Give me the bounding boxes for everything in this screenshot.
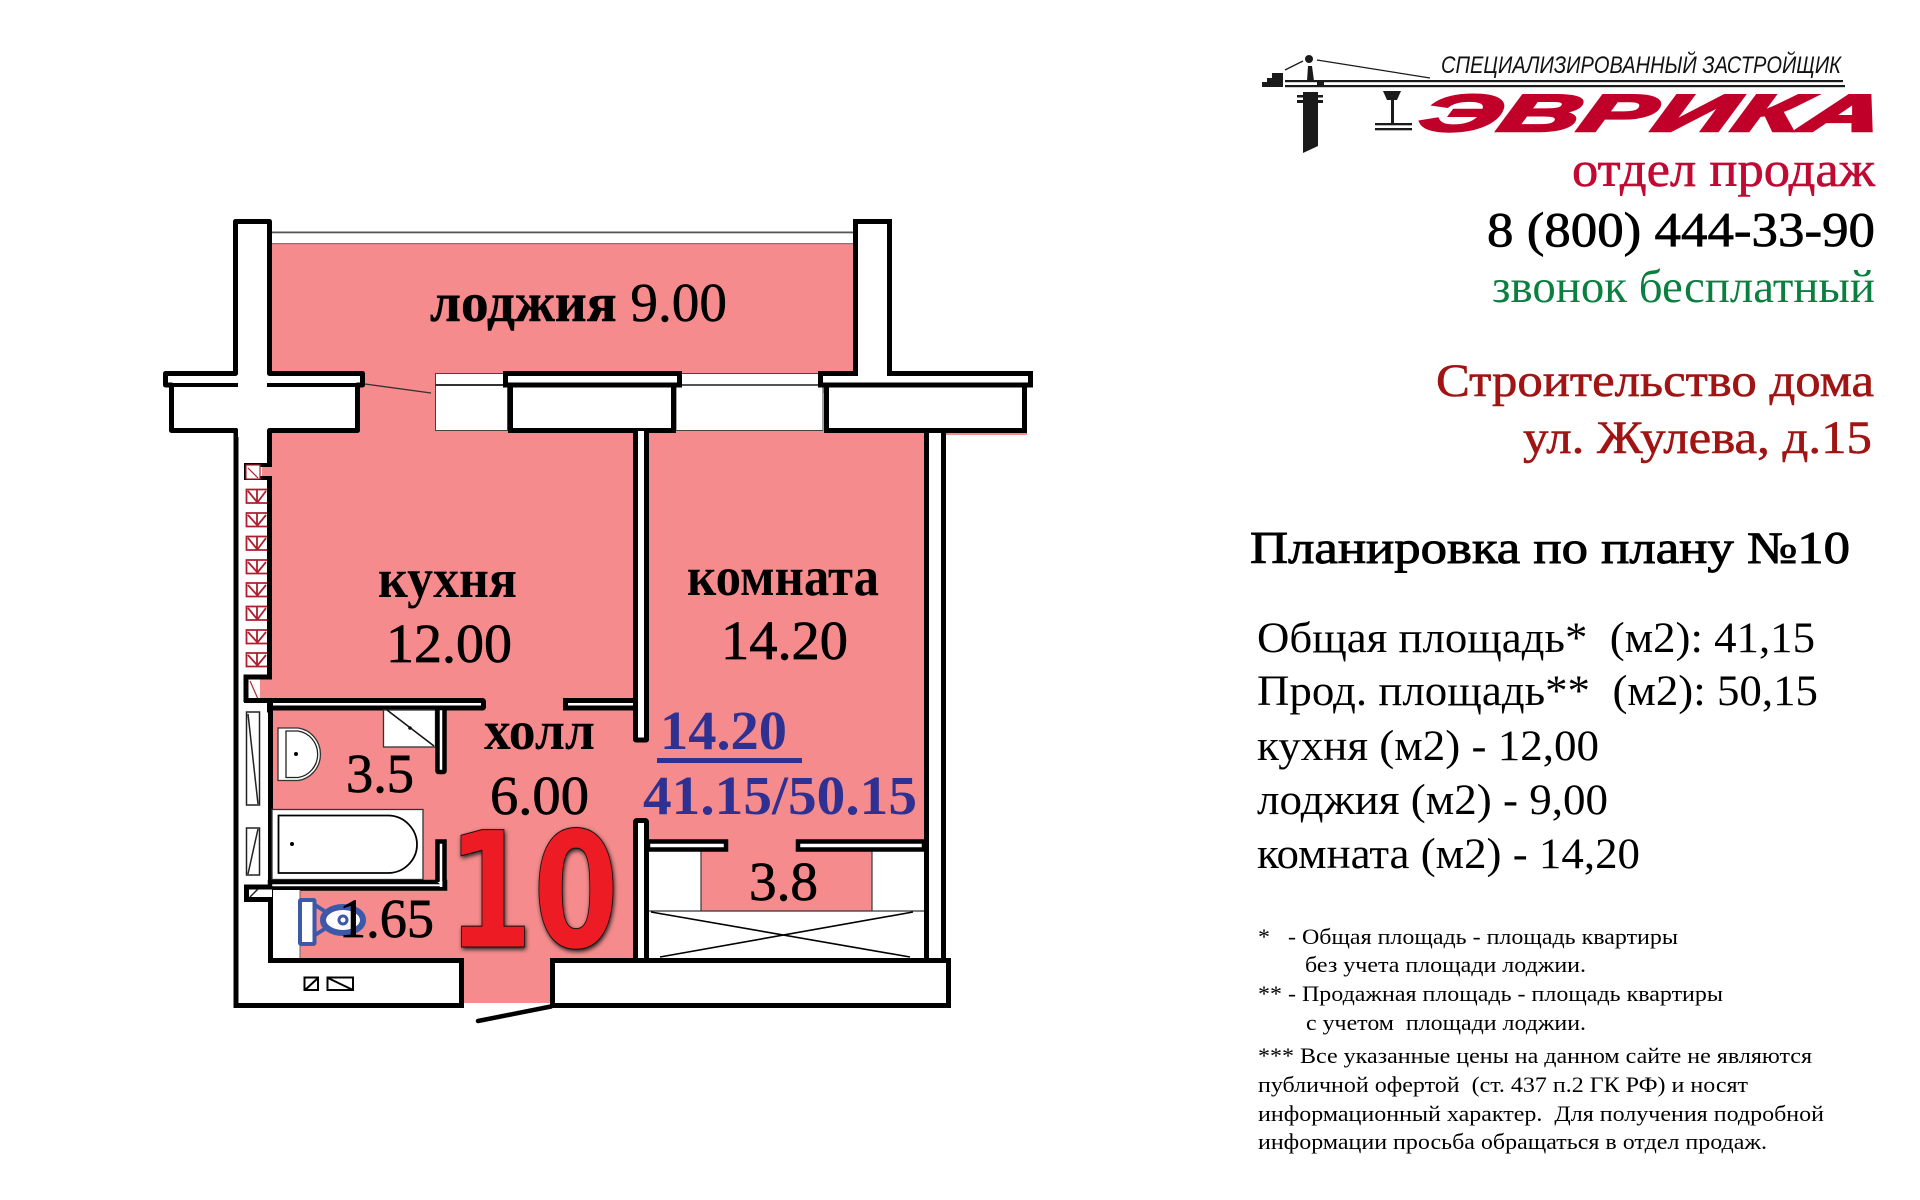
sales department heading: отдел продаж (1572, 141, 1875, 197)
central partition (636, 431, 646, 958)
room lower partitions (648, 842, 924, 850)
icon: toilet (300, 900, 363, 944)
window slot lower (246, 828, 260, 875)
entrance door (478, 1006, 551, 1021)
area list: Прод. площадь** (м2): 50,15 (1257, 668, 1818, 715)
shower (384, 710, 436, 747)
footnotes: информационный характер. Для получения подробной (1258, 1101, 1824, 1126)
area fraction: 14.20 (660, 700, 787, 761)
room label: hall (484, 700, 595, 826)
area fraction: 41.15/50.15 (643, 765, 917, 826)
left wall column and bottom box (236, 431, 462, 1006)
middle wall pier (506, 374, 680, 430)
room label: bathroom: 3.5 (346, 743, 414, 804)
sink (278, 728, 320, 780)
footnotes: публичной офертой (ст. 437 п.2 ГК РФ) и носят (1258, 1072, 1748, 1097)
kitchen/bath partition (244, 698, 484, 708)
phone number: 8 (800) 444-33-90 (1487, 202, 1875, 257)
area list (1257, 615, 1818, 878)
room label: kitchen: 12.00 (386, 613, 512, 674)
footnotes: информации просьба обращаться в отдел продаж. (1258, 1129, 1767, 1154)
area list: Общая площадь* (м2): 41,15 (1257, 615, 1815, 662)
sales contact block (1487, 141, 1875, 313)
footnotes: ** - Продажная площадь - площадь квартиры (1258, 981, 1723, 1006)
toilet niche (246, 887, 300, 959)
footnotes: *** Все указанные цены на данном сайте не являются (1258, 1043, 1812, 1068)
bathroom left wall (268, 708, 272, 890)
logo wordmark: ЭВРИКА (1412, 85, 1893, 143)
room label: toilet: 1.65 (339, 888, 434, 949)
floor plan (166, 222, 1030, 1021)
panel: pink apartment floor (270, 243, 1027, 1003)
construction address: ул. Жулева, д.15 (1523, 412, 1872, 464)
bathtub (272, 810, 423, 880)
plan number: 10 (447, 798, 619, 985)
hall partition stub (566, 700, 633, 708)
bathroom partition walls (270, 708, 445, 888)
window: room (676, 374, 823, 430)
area fraction (643, 700, 917, 826)
area list: комната (м2) - 14,20 (1257, 831, 1640, 878)
icon: tower crane (1262, 55, 1845, 153)
free call note: звонок бесплатный (1492, 261, 1875, 313)
room label: balcony niche: 3.8 (749, 851, 818, 912)
room label: hall: холл (484, 700, 595, 761)
room label: room (687, 546, 879, 671)
right structural wall (820, 222, 1030, 430)
logo: Эврика developer (1262, 51, 1893, 153)
room label: loggia: лоджия 9.00 (430, 272, 727, 333)
footnotes (1258, 924, 1824, 1154)
room label: kitchen (378, 548, 517, 674)
lower right wall box (552, 960, 948, 1006)
loggia railing (270, 232, 855, 244)
footnotes: с учетом площади лоджии. (1306, 1010, 1586, 1035)
room label: hall: 6.00 (490, 765, 589, 826)
right outer wall (924, 433, 946, 958)
room label: room: комната (687, 546, 879, 607)
construction address: Строительство дома (1436, 355, 1874, 407)
plan title: Планировка по плану №10 (1250, 523, 1850, 573)
footnotes: без учета площади лоджии. (1305, 952, 1586, 977)
closet whites and balcony (649, 850, 924, 958)
room label: room: 14.20 (721, 610, 848, 671)
window: kitchen balcony door (365, 374, 508, 430)
area list: кухня (м2) - 12,00 (1257, 723, 1599, 770)
logo tagline: СПЕЦИАЛИЗИРОВАННЫЙ ЗАСТРОЙЩИК (1441, 51, 1843, 79)
footnotes: * - Общая площадь - площадь квартиры (1258, 924, 1678, 949)
area list: лоджия (м2) - 9,00 (1257, 777, 1608, 824)
window slot upper (246, 712, 260, 805)
construction address (1436, 355, 1874, 464)
room label: kitchen: кухня (378, 548, 517, 609)
vent stack on kitchen wall (246, 465, 273, 702)
vent marks in lower wall (304, 978, 353, 990)
left structural wall (166, 222, 362, 700)
